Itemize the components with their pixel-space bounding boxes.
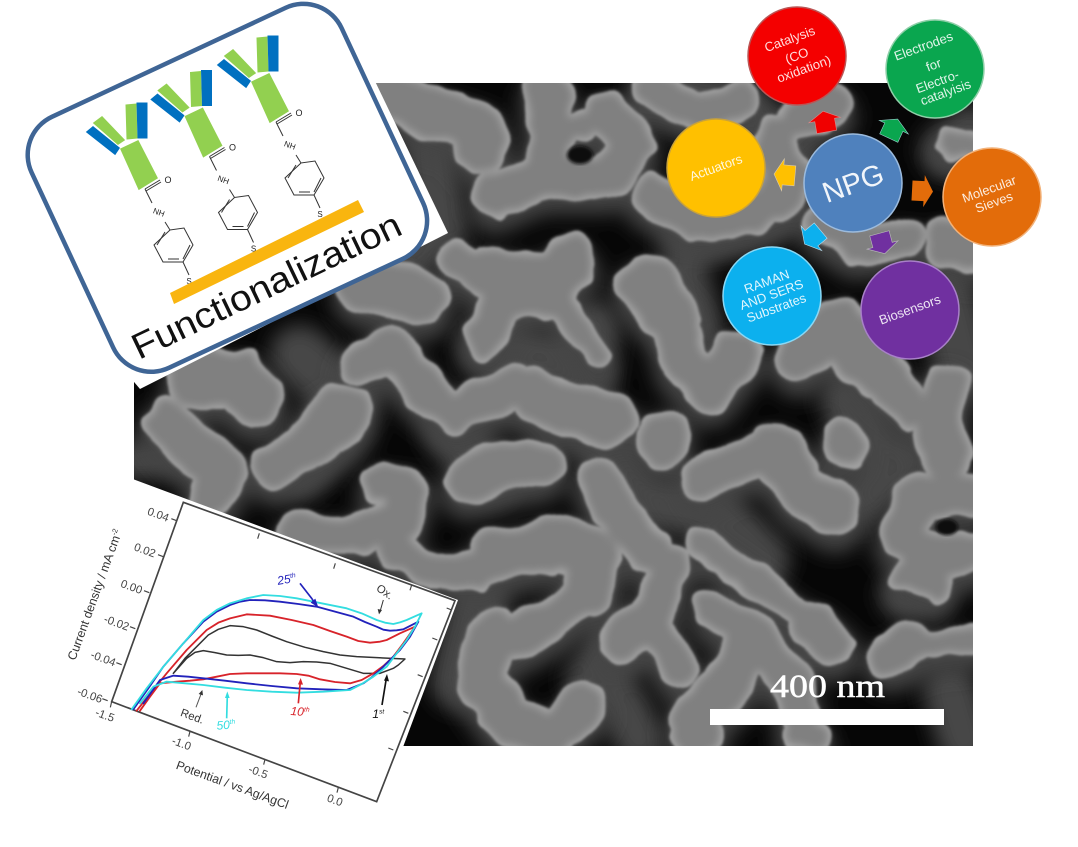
node: Actuators (667, 119, 765, 217)
y axis title: Current density / mA cm (65, 534, 123, 662)
annotation 1st: 1 (372, 707, 379, 721)
panel: functionalization (14, 0, 448, 389)
plot frame (102, 502, 455, 802)
panel: NPG application diagram (667, 7, 1041, 359)
arrow: to electrodes (874, 112, 912, 145)
chart background (38, 478, 458, 847)
annotation Ox. (374, 583, 395, 614)
node: Electrodes: catalyisis (918, 76, 973, 108)
tick labels: 0.00 (119, 578, 144, 597)
node: NPG: NPG (818, 158, 888, 210)
x axis title: Potential / vs Ag/AgCl (174, 758, 290, 812)
annotation Ox.: Ox. (374, 583, 395, 602)
node: Biosensors: Biosensors (877, 291, 943, 328)
node: NPG (804, 134, 902, 232)
scale label: 400 nm (770, 669, 885, 705)
node: Actuators: Actuators (687, 151, 745, 184)
tick labels: -0.02 (102, 614, 131, 634)
node: Catalysis: (CO (783, 44, 811, 67)
tick labels: -0.5 (247, 764, 269, 782)
node: RAMAN and SERS: RAMAN (742, 266, 791, 297)
node: Biosensors (861, 261, 959, 359)
annotation Red.: Red. (179, 707, 205, 727)
arrow: to biosensors (864, 229, 900, 258)
panel border (14, 0, 441, 386)
annotation 10th (290, 678, 310, 719)
annotation 10th: th (304, 706, 310, 714)
voltammetry curves (132, 595, 422, 711)
panel background (20, 0, 448, 389)
panel: cyclic voltammetry chart (38, 478, 458, 847)
node: Electrodes: for (924, 55, 944, 74)
annotation 25th: 25 (276, 572, 292, 588)
node: Electrodes: Electro- (914, 67, 961, 96)
tick labels: -1.5 (93, 707, 116, 725)
tick labels: -1.0 (170, 735, 193, 753)
tick labels: 0.04 (146, 506, 170, 525)
SEM micrograph of nanoporous gold (134, 83, 973, 750)
node: Catalysis: Catalysis (762, 23, 818, 55)
arrow: to RAMAN substrates (794, 218, 831, 256)
annotation 25th: th (290, 572, 296, 580)
node: Catalysis: oxidation) (775, 52, 833, 86)
node: Electrodes (886, 20, 984, 118)
y axis title: -2 (109, 527, 120, 536)
annotation 1st (372, 674, 389, 721)
node: Molecular Sieves: Molecular (960, 172, 1019, 206)
scale bar (710, 669, 944, 725)
node: RAMAN and SERS (723, 247, 821, 345)
arrow: to catalysis (807, 108, 842, 135)
annotation 10th: 10 (290, 704, 304, 719)
antibody molecules with linkers (87, 36, 324, 286)
tick labels: -0.04 (89, 649, 117, 669)
node: Electrodes: Electrodes (892, 28, 955, 64)
tick labels: 0.0 (325, 793, 344, 809)
arrow: to actuators (773, 158, 796, 192)
gold surface bar (170, 200, 364, 304)
tick labels: -0.06 (75, 686, 104, 706)
annotation 50th: 50 (216, 718, 230, 733)
annotation 1st: st (379, 708, 385, 715)
node: RAMAN and SERS: Substrates (745, 290, 809, 325)
annotation 50th (216, 691, 236, 733)
arrow: to molecular sieves (911, 174, 934, 208)
annotation Red. (179, 690, 205, 727)
tick labels (75, 506, 344, 809)
node: RAMAN and SERS: AND SERS (738, 276, 806, 313)
node: Catalysis (748, 7, 846, 105)
node: Molecular Sieves (943, 148, 1041, 246)
node: Molecular Sieves: Sieves (973, 188, 1015, 216)
tick labels: 0.02 (132, 542, 157, 560)
annotation 50th: th (229, 719, 236, 726)
label: Functionalization (125, 204, 408, 367)
annotation 25th (275, 571, 318, 607)
curve annotations (179, 571, 395, 733)
